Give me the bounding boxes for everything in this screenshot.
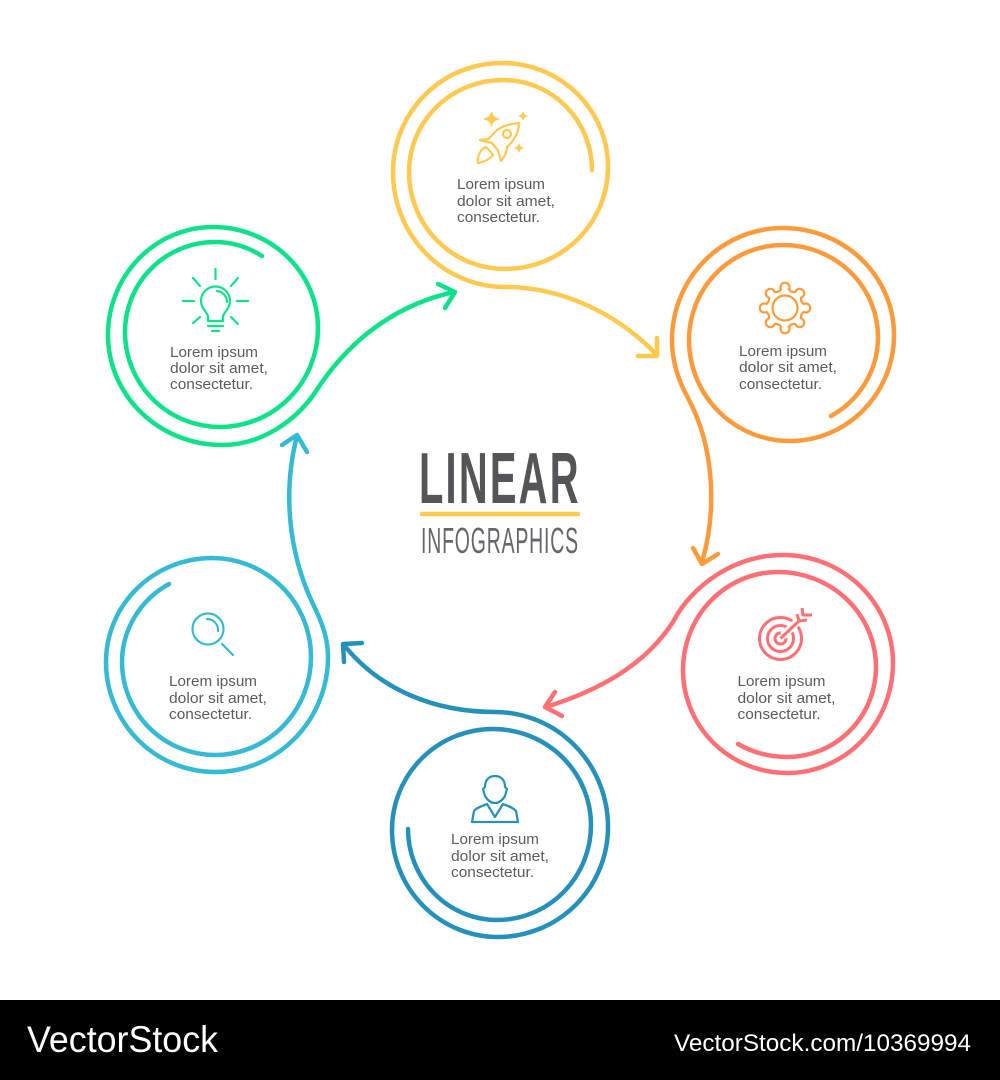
text: step 2: Lorem ipsum	[739, 344, 827, 360]
step 6: green bulb	[108, 227, 455, 445]
text: step 3: consectetur.	[738, 707, 820, 723]
orange spiral arrow	[672, 228, 894, 564]
step 3: red target	[545, 555, 893, 773]
footer bar	[0, 1000, 1000, 1080]
text: step 3: Lorem ipsum	[738, 674, 826, 690]
yellow spiral arrow	[393, 63, 657, 356]
red spiral arrow	[545, 555, 893, 773]
step 2: orange gear	[672, 228, 894, 564]
icon: light bulb	[183, 269, 248, 331]
green spiral arrow	[108, 227, 455, 445]
blue spiral arrow	[343, 643, 608, 937]
footer image id: VectorStock.com/10369994	[674, 1030, 971, 1057]
text: step 4: consectetur.	[451, 865, 534, 881]
text: step 1: dolor sit amet,	[457, 194, 555, 210]
text: step 6: Lorem ipsum	[170, 345, 258, 361]
text: step 5: Lorem ipsum	[169, 674, 257, 690]
title underline	[422, 512, 578, 516]
text: step 4: Lorem ipsum	[451, 832, 539, 848]
footer logo text: VectorStock	[27, 1019, 218, 1060]
step 4: blue person	[343, 643, 608, 937]
icon: magnifier	[192, 614, 233, 655]
title: LINEAR: LINEAR	[419, 439, 579, 519]
cyan spiral arrow	[106, 435, 328, 772]
step 5: cyan magnifier	[106, 435, 328, 772]
text: step 6: consectetur.	[170, 377, 253, 393]
text: step 5: consectetur.	[169, 707, 252, 723]
text: step 3: dolor sit amet,	[738, 691, 836, 707]
text: step 4: dolor sit amet,	[451, 849, 549, 865]
subtitle: INFOGRAPHICS: INFOGRAPHICS	[421, 522, 578, 562]
icon: target	[760, 608, 812, 660]
text: step 2: dolor sit amet,	[739, 360, 837, 376]
step 1: yellow rocket	[393, 63, 657, 356]
icon: person	[472, 776, 518, 822]
text: step 6: dolor sit amet,	[170, 361, 268, 377]
icon: gear	[760, 283, 810, 333]
icon: rocket	[478, 112, 527, 163]
text: step 5: dolor sit amet,	[169, 691, 267, 707]
text: step 2: consectetur.	[739, 377, 822, 393]
text: step 1: Lorem ipsum	[457, 177, 545, 193]
text: step 1: consectetur.	[457, 210, 540, 226]
